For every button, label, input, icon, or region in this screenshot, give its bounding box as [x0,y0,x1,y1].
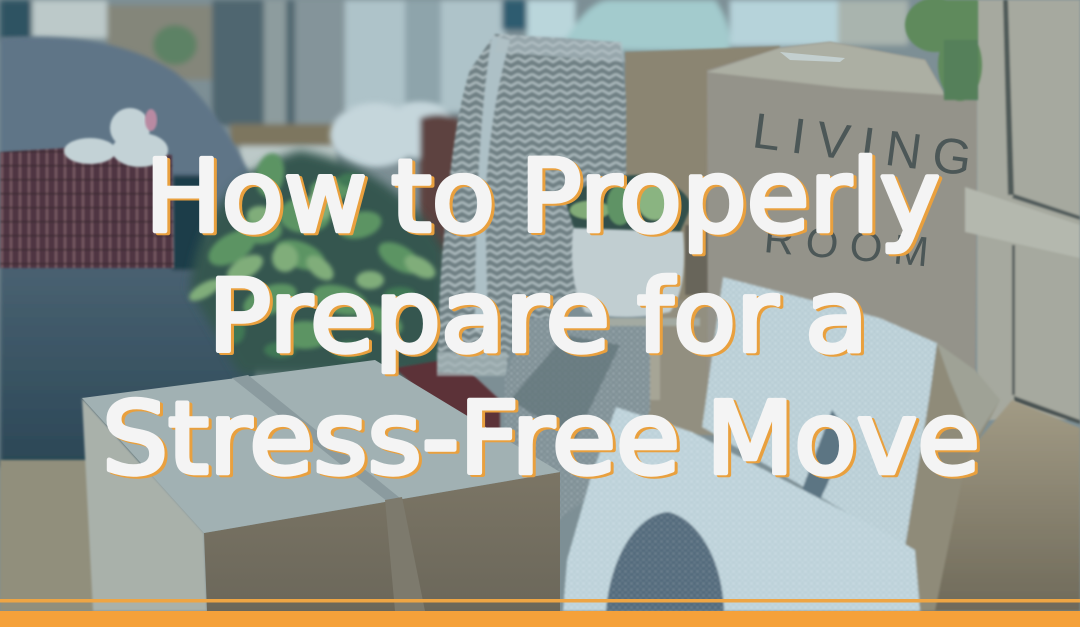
plant [186,150,445,375]
title: a [805,258,868,375]
wicker basket with plush toy [0,108,174,268]
green plush [905,0,982,101]
white cloth and teddy [330,102,460,270]
lower blanket under bubble wrap [505,318,700,520]
title [102,138,980,497]
bubble wrap sheets [563,277,1000,611]
bottom orange band [0,611,1080,627]
title: Prepare [208,258,610,375]
white pot [572,228,684,317]
chevron blanket [437,34,626,376]
potted plant [565,175,692,317]
red object behind box [395,358,500,440]
right stacked boxes [965,0,1080,424]
title: Stress-Free [102,380,680,497]
handwriting: room: ROOM [762,214,931,275]
title: How [145,138,367,255]
tan box bottom right [922,400,1080,611]
bottom orange rule [0,599,1080,602]
foreground cardboard box [82,360,560,611]
title: to [391,138,495,255]
cardboard box behind blanket [625,46,780,435]
handwriting: living: LIVING [750,102,975,187]
title: Properly [520,138,940,255]
armchair [0,37,255,467]
labelled cardboard box [707,42,978,425]
title: for [637,258,779,375]
title: Move [706,380,980,497]
floor [0,460,95,611]
